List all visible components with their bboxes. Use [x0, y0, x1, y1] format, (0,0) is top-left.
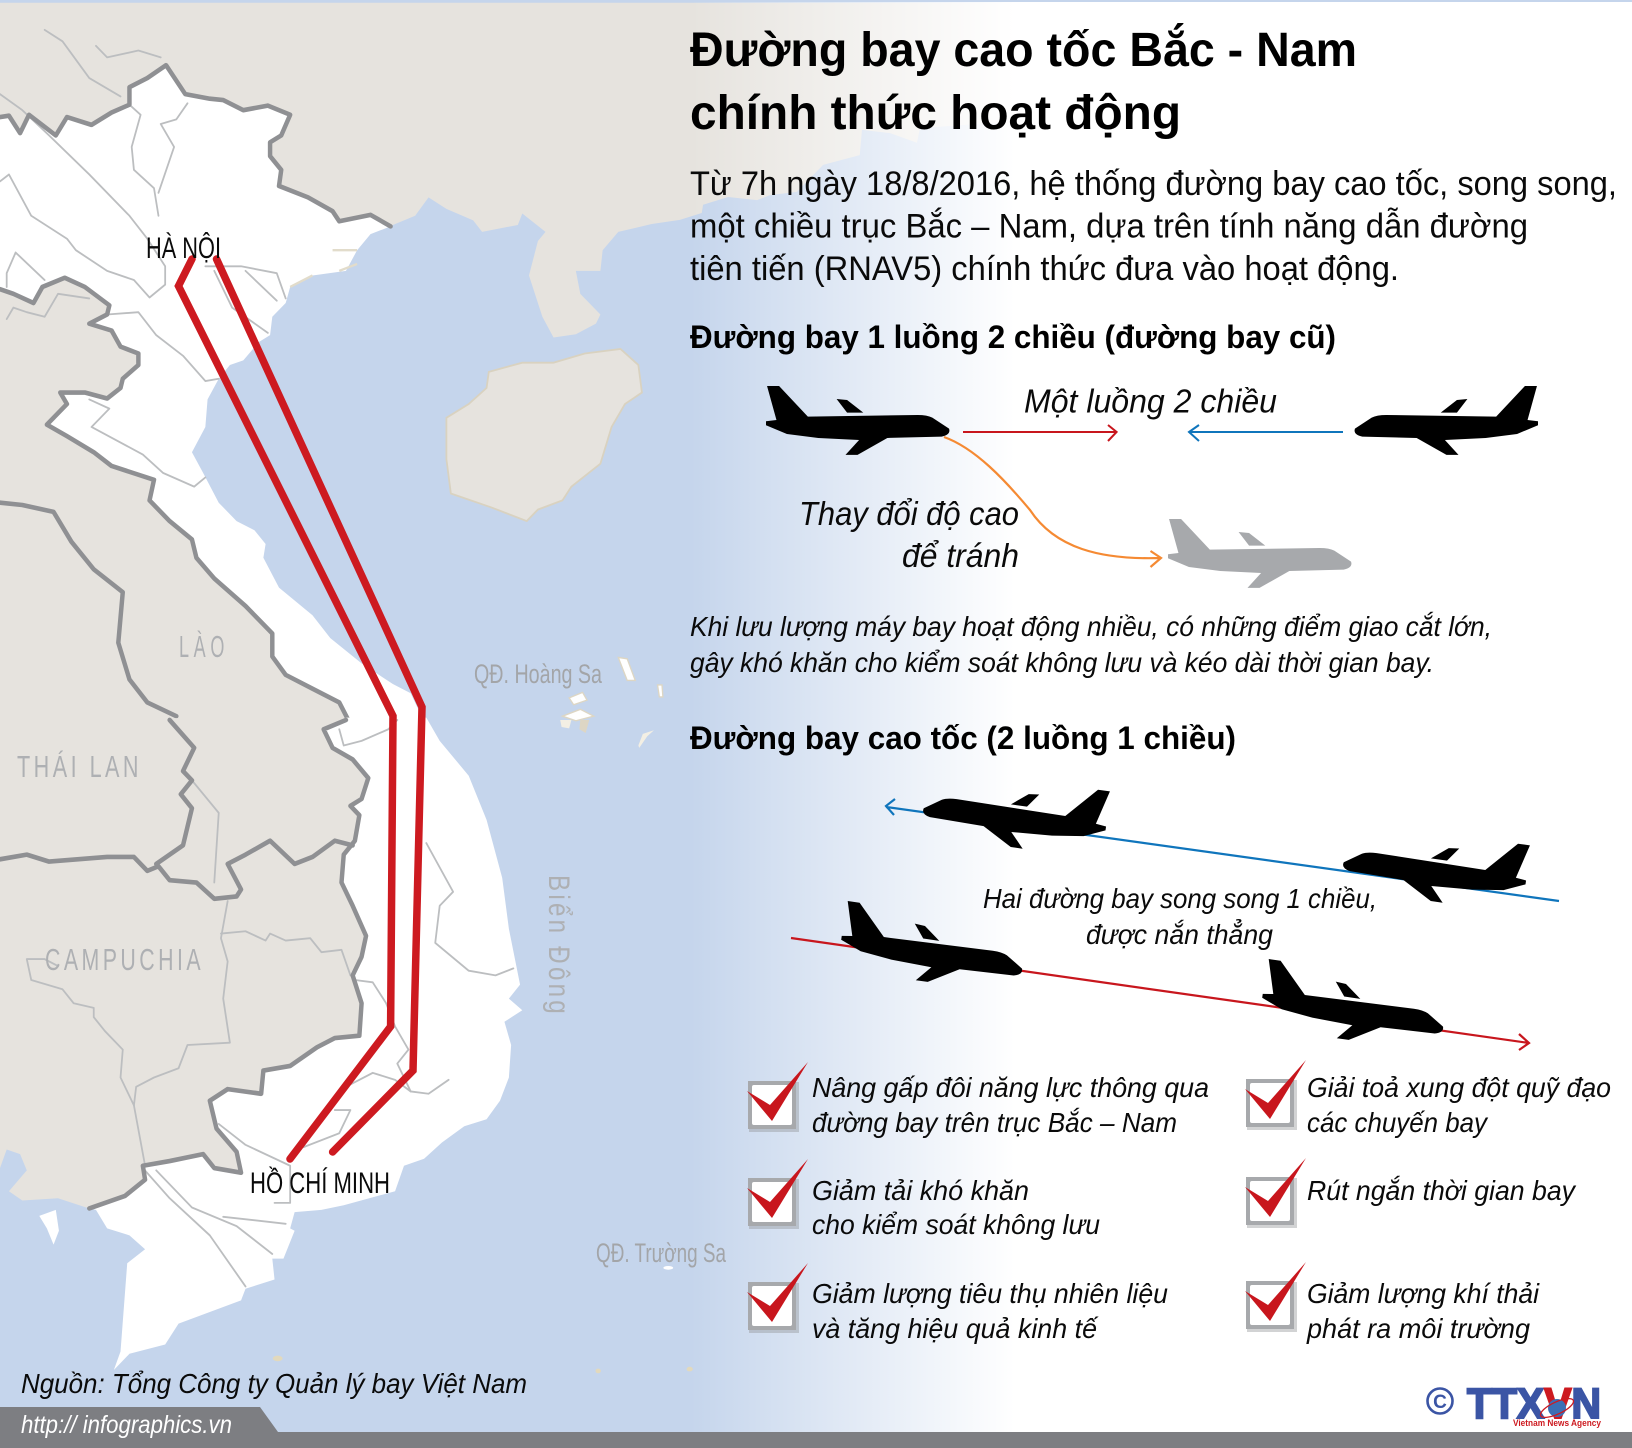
border Vietnam west — [0, 278, 348, 720]
intro paragraph: một chiều trục Bắc – Nam, dựa trên tính năng dẫn đường — [690, 208, 1528, 246]
plane: right black — [1355, 386, 1538, 455]
wordmark: TTXVN — [1467, 1380, 1601, 1428]
diagram: old route — [766, 382, 1538, 588]
benefit 4: Giải toả xung đột quỹ đạo — [1307, 1072, 1611, 1103]
old route note: gây khó khăn cho kiểm soát không lưu và kéo dài thời gian bay. — [690, 647, 1434, 678]
plane A — [920, 766, 1111, 860]
benefit 2: Giảm tải khó khăn — [812, 1175, 1029, 1206]
islands: Hoàng Sa — [562, 657, 663, 721]
benefit 2: cho kiểm soát không lưu — [812, 1209, 1100, 1240]
top strip — [0, 0, 1632, 2]
label: Thái Lan: THÁI LAN — [17, 749, 142, 784]
benefit 5: Rút ngắn thời gian bay — [1307, 1175, 1577, 1206]
benefit 6 — [1245, 1262, 1540, 1344]
neighbouring land north — [0, 3, 1632, 720]
intro paragraph: tiên tiến (RNAV5) chính thức đưa vào hoạt động. — [690, 250, 1399, 288]
intro paragraph: Từ 7h ngày 18/8/2016, hệ thống đường bay cao tốc, song song, — [690, 165, 1617, 203]
rivers and thin borders south — [27, 720, 513, 1286]
benefit 5 — [1245, 1158, 1577, 1228]
old route note: Khi lưu lượng máy bay hoạt động nhiều, có những điểm giao cắt lớn, — [690, 611, 1492, 642]
flight routes: two red parallel lines — [178, 259, 422, 1159]
label: Hoàng Sa: QĐ. Hoàng Sa — [474, 659, 603, 689]
map: northern land — [0, 3, 1632, 722]
label: Hồ Chí Minh: HỒ CHÍ MINH — [250, 1166, 390, 1200]
title — [690, 22, 1357, 140]
plane: grey — [1168, 519, 1351, 588]
border north — [0, 65, 391, 226]
heading: expressway: Đường bay cao tốc (2 luồng 1 chiều) — [690, 720, 1236, 756]
logo: TTXVN — [1428, 1380, 1602, 1429]
border Cambodia north — [0, 841, 353, 899]
route 2 — [216, 259, 422, 1152]
map labels — [17, 231, 727, 1268]
map: southern land — [0, 718, 693, 1373]
diagram: expressway — [791, 766, 1559, 1053]
agency name: Vietnam News Agency — [1513, 1418, 1602, 1429]
label: change altitude: Thay đổi độ cao — [799, 495, 1019, 532]
label: change altitude — [799, 495, 1019, 574]
rivers north — [0, 30, 286, 487]
benefit 3: và tăng hiệu quả kinh tế — [812, 1313, 1099, 1344]
heading: old route: Đường bay 1 luồng 2 chiều (đường bay cũ) — [690, 319, 1336, 355]
footer url: http:// infographics.vn — [21, 1411, 232, 1439]
line: red — [791, 938, 1529, 1050]
border Laos Thailand — [0, 503, 176, 716]
benefit 1: Nâng gấp đôi năng lực thông qua — [812, 1072, 1209, 1103]
copyright mark — [1428, 1388, 1452, 1414]
old route note — [690, 611, 1492, 678]
benefit 1: đường bay trên trục Bắc – Nam — [812, 1107, 1177, 1138]
arrow: blue left — [1189, 425, 1343, 441]
border Vietnam west south — [89, 720, 368, 1208]
neighbouring land south — [0, 718, 446, 1208]
fade over map — [690, 0, 1015, 1448]
footer band — [0, 1407, 1632, 1448]
island: Phú Quốc — [39, 1210, 59, 1245]
coastal sand — [290, 250, 357, 287]
label: Campuchia: CAMPUCHIA — [45, 942, 204, 977]
islands: Trường Sa — [273, 720, 693, 1373]
plane C — [837, 901, 1028, 995]
label: Hà Nội: HÀ NỘI — [146, 231, 221, 265]
Vietnam north land — [0, 65, 424, 722]
route 1 — [178, 259, 393, 1159]
plane: left black — [766, 386, 949, 455]
copyright mark: C — [1433, 1392, 1447, 1413]
label: parallel routes: Hai đường bay song song 1 chiều, — [983, 883, 1377, 914]
plane B — [1340, 820, 1531, 914]
benefits list — [747, 1060, 1611, 1344]
label: change altitude: để tránh — [902, 537, 1019, 574]
label: Trường Sa: QĐ. Trường Sa — [596, 1238, 727, 1268]
label: parallel routes — [983, 883, 1377, 950]
island: Hải Nam — [446, 349, 642, 521]
benefit 3: Giảm lượng tiêu thụ nhiên liệu — [812, 1278, 1168, 1309]
globe — [1538, 1395, 1576, 1421]
label: parallel routes: được nắn thẳng — [1086, 918, 1273, 950]
title: chính thức hoạt động — [690, 87, 1181, 140]
benefit 4 — [1245, 1060, 1611, 1138]
label: Lào: LÀO — [179, 629, 229, 664]
benefit 2 — [747, 1159, 1100, 1240]
plane D — [1258, 959, 1449, 1053]
white right side — [1014, 0, 1632, 1448]
benefit 3 — [747, 1263, 1168, 1344]
source: Nguồn: Tổng Công ty Quản lý bay Việt Nam — [21, 1368, 527, 1399]
benefit 1 — [747, 1062, 1209, 1138]
line: blue — [886, 799, 1559, 901]
label: one lane two ways: Một luồng 2 chiều — [1024, 382, 1277, 420]
Vietnam south land — [89, 718, 522, 1370]
arrow: red right — [963, 425, 1117, 441]
benefit 6: phát ra môi trường — [1306, 1313, 1531, 1344]
benefit 4: các chuyến bay — [1307, 1107, 1489, 1138]
title: Đường bay cao tốc Bắc - Nam — [690, 22, 1357, 77]
benefit 6: Giảm lượng khí thải — [1307, 1278, 1540, 1309]
border Laos Thailand Cambodia — [156, 720, 194, 864]
arrow: orange avoid — [944, 437, 1161, 567]
label: Biển Đông: Biển Đông — [542, 875, 575, 1017]
intro paragraph — [690, 165, 1617, 288]
